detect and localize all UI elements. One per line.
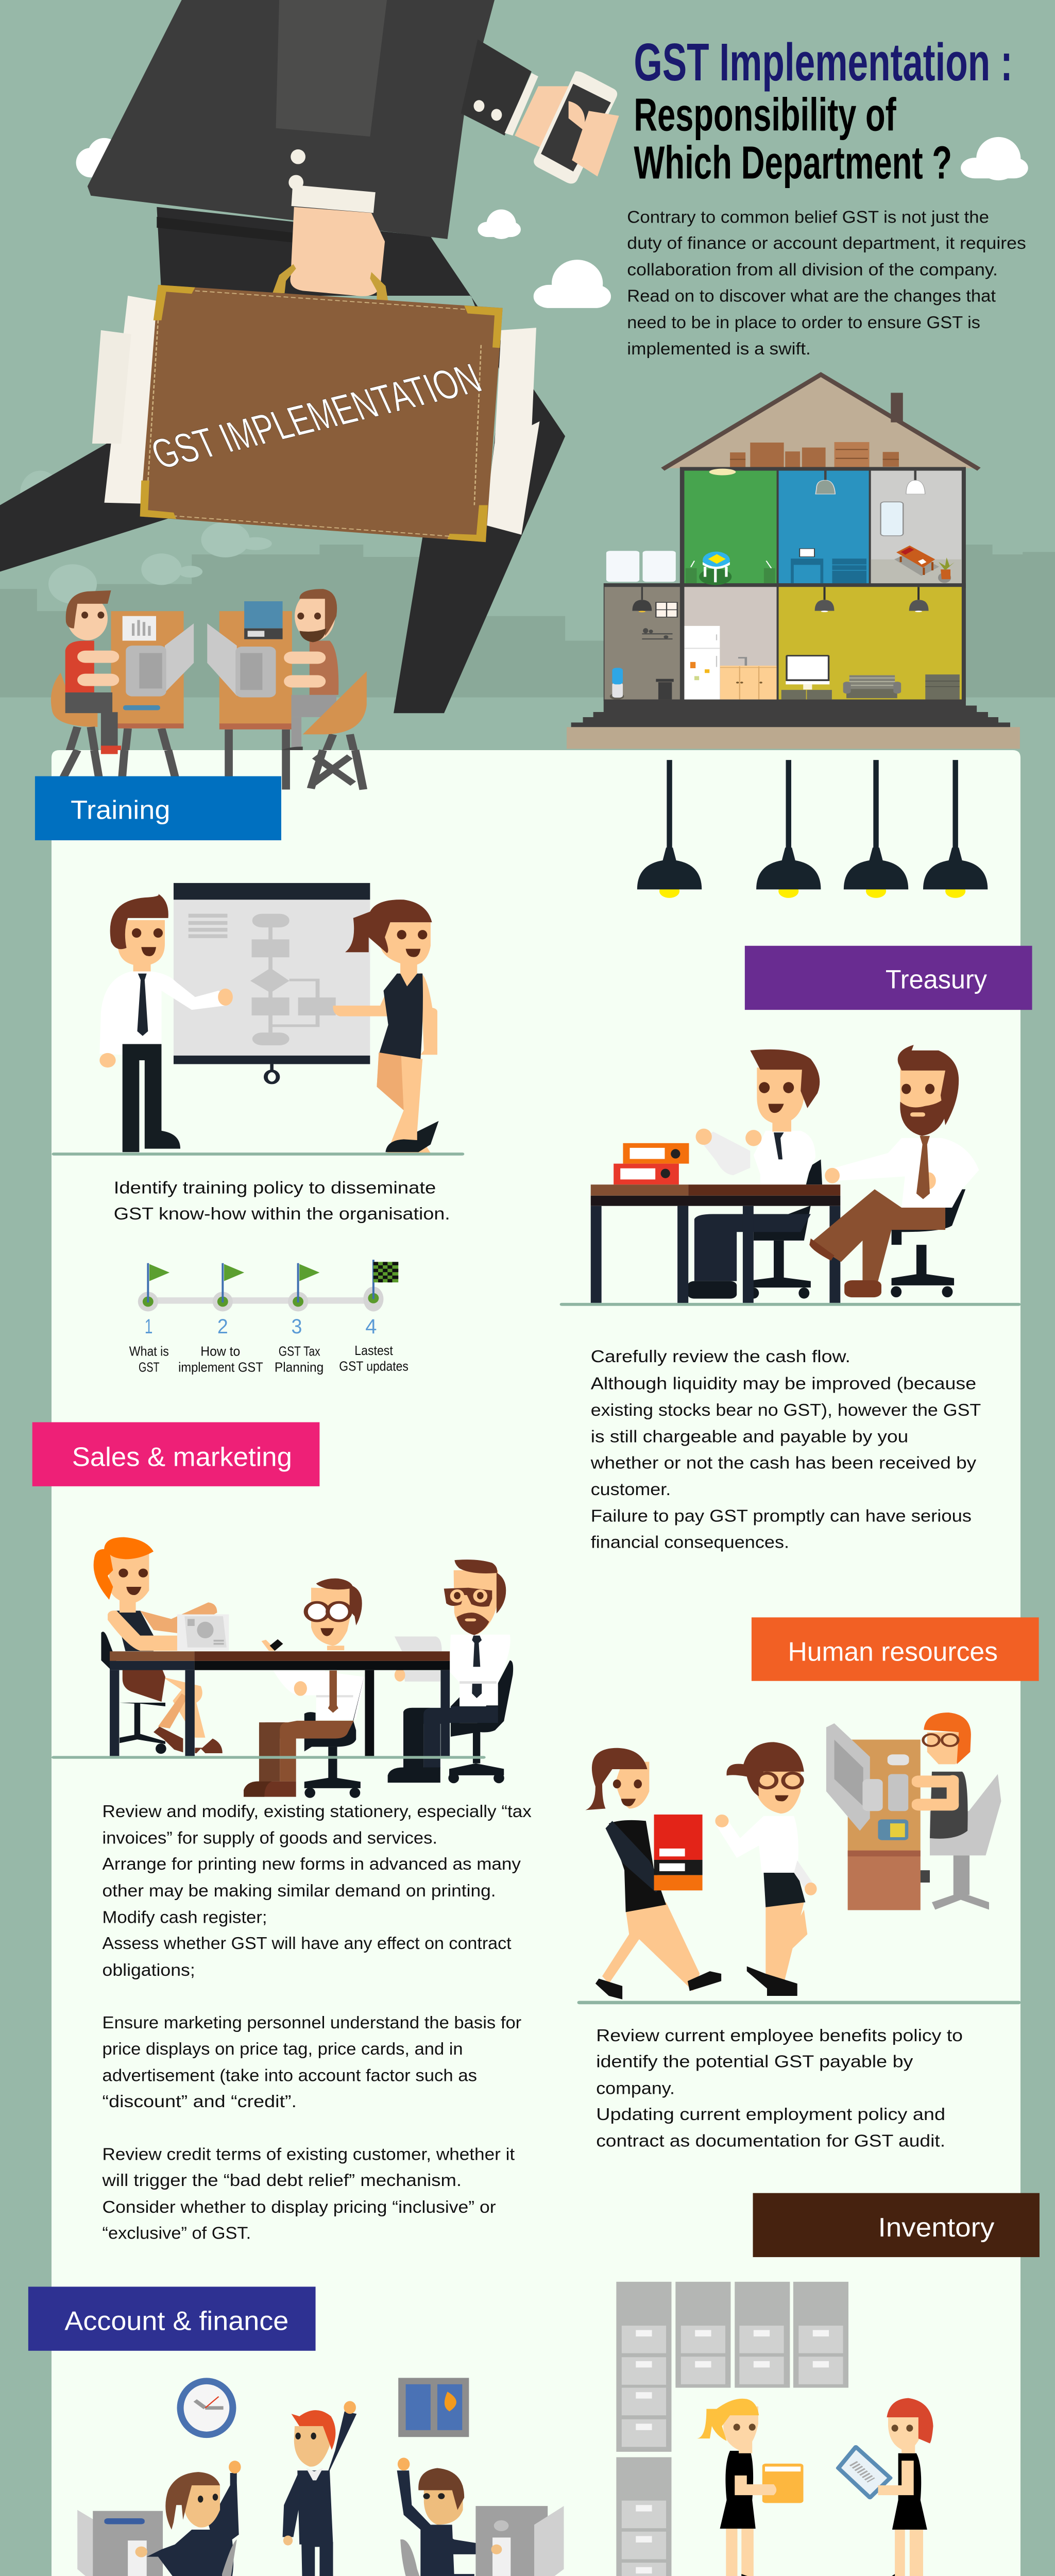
- tag: account and finance: Account & finance: [64, 2307, 288, 2336]
- intro paragraph: [627, 208, 1026, 358]
- illustration: treasury meeting: [591, 1045, 979, 1303]
- right desk and man: [397, 2458, 564, 2576]
- seated man right with beard: [809, 1045, 979, 1297]
- desk: [591, 1184, 840, 1303]
- roadmap flags: [129, 1260, 409, 1375]
- room: living: [779, 587, 962, 700]
- roadmap flags: GST: [139, 1360, 160, 1375]
- sales text end: “exclusive” of GST.: [103, 2224, 251, 2243]
- sales text end: Consider whether to display pricing “inclusive” or: [103, 2198, 496, 2216]
- treasury text part 1: Carefully review the cash flow.: [591, 1347, 850, 1366]
- seated man left: [688, 1049, 822, 1299]
- room: storage: [604, 587, 680, 700]
- title: [634, 32, 1013, 189]
- sales text: Review credit terms of existing customer, whether it: [103, 2145, 515, 2164]
- phone and hand: [515, 71, 619, 183]
- sales text end: [103, 2198, 496, 2243]
- roadmap flags: 1: [145, 1315, 152, 1338]
- roadmap flags: implement GST: [178, 1360, 263, 1375]
- main panel: [52, 750, 1020, 2576]
- HR text: contract as documentation for GST audit.: [596, 2131, 945, 2150]
- section: inventory and account: [28, 2193, 1040, 2576]
- sales text: Review and modify, existing stationery, especially “tax: [103, 1802, 532, 1821]
- sales text: price displays on price tag, price cards, and in: [103, 2040, 463, 2058]
- roadmap flags: 4: [365, 1315, 377, 1338]
- roadmap flags: 2: [217, 1315, 228, 1338]
- house roof: [663, 374, 979, 469]
- right man: [388, 1560, 513, 1783]
- roadmap flags: What is: [129, 1344, 169, 1359]
- cloud left: [76, 138, 121, 177]
- giant businessman: [0, 0, 619, 713]
- wall clock: [177, 2378, 236, 2438]
- treasury text part 2: is still chargeable and payable by you: [591, 1427, 908, 1446]
- left desk and woman: [77, 2461, 241, 2576]
- room: blue: [779, 471, 869, 583]
- HR text: [596, 2026, 963, 2150]
- sales text: will trigger the “bad debt relief” mechanism.: [102, 2171, 462, 2190]
- sales text: Modify cash register;: [103, 1908, 267, 1927]
- jacket: [88, 0, 538, 239]
- hero scene: [0, 0, 1055, 789]
- room: grey: [871, 471, 962, 583]
- tag: sales and marketing: Sales & marketing: [72, 1443, 292, 1472]
- tag: treasury: [745, 946, 1032, 1010]
- illustration: inventory: [616, 2282, 933, 2576]
- woman with folder: [696, 2399, 803, 2576]
- treasury text part 2: [590, 1427, 976, 1552]
- intro paragraph: implemented is a swift.: [627, 340, 811, 358]
- roadmap flags: 3: [292, 1315, 302, 1338]
- cuff and holding hand: [290, 185, 385, 296]
- sales text: Assess whether GST will have any effect on contract: [103, 1934, 512, 1953]
- cloud small: [478, 210, 521, 239]
- woman with binders: [585, 1748, 721, 1999]
- section: training and treasury: [35, 760, 1032, 1419]
- HR text: company.: [596, 2079, 675, 2098]
- cloud medium: [534, 260, 611, 308]
- briefcase: [92, 264, 539, 542]
- sales text: Arrange for printing new forms in advanced as many: [103, 1855, 521, 1874]
- trousers: [0, 207, 565, 713]
- meeting table: [110, 1651, 450, 1756]
- tag: human resources: [752, 1617, 1039, 1681]
- roadmap flags: Lastest: [354, 1343, 393, 1358]
- training text: [114, 1178, 450, 1224]
- training text: GST know-how within the organisation.: [114, 1205, 450, 1224]
- hanging lamps: [637, 760, 988, 898]
- roadmap flags: How to: [200, 1344, 240, 1359]
- training text: Identify training policy to disseminate: [114, 1178, 436, 1197]
- house base and steps: [567, 700, 1020, 749]
- roof-level white tanks: [606, 551, 676, 582]
- roadmap flags: Planning: [275, 1360, 324, 1375]
- section: sales and human resources: [32, 1422, 1039, 2190]
- sales text: other may be making similar demand on printing.: [103, 1882, 496, 1900]
- illustration: account and finance: [77, 2378, 564, 2576]
- cloud right: [961, 137, 1028, 180]
- roadmap flags: GST Tax: [279, 1344, 320, 1359]
- sales text: obligations;: [103, 1961, 195, 1979]
- tag: account and finance: [28, 2286, 316, 2351]
- HR text: identify the potential GST payable by: [596, 2052, 913, 2071]
- woman seated: [94, 1537, 229, 1754]
- room: kitchen: [684, 587, 777, 700]
- treasury text part 2: whether or not the cash has been received by: [590, 1453, 976, 1472]
- middle man: [244, 1579, 365, 1798]
- treasury text part 2: customer.: [591, 1480, 671, 1499]
- sales text: Ensure marketing personnel understand the basis for: [103, 2013, 521, 2032]
- roadmap flags: GST updates: [339, 1359, 409, 1374]
- left colleague at desk: [51, 590, 194, 789]
- repaint desk legs above panel: [57, 750, 363, 789]
- woman with glasses: [715, 1742, 817, 1996]
- woman with tablet: [838, 2398, 933, 2576]
- treasury text part 2: financial consequences.: [591, 1533, 789, 1552]
- tag: treasury: Treasury: [886, 965, 987, 994]
- sales text: “discount” and “credit”.: [103, 2092, 297, 2111]
- skyline: [0, 471, 1055, 698]
- tag: inventory: Inventory: [878, 2213, 994, 2243]
- standing man: [283, 2401, 356, 2576]
- tag: sales and marketing: [32, 1422, 319, 1486]
- tag: inventory: [753, 2193, 1040, 2257]
- sales text: advertisement (take into account factor such as: [103, 2066, 477, 2085]
- tag: training: [35, 776, 281, 840]
- treasury text part 2: Failure to pay GST promptly can have serious: [591, 1507, 972, 1526]
- right colleague at desk: [207, 589, 367, 789]
- sales text: [102, 1802, 532, 2190]
- tag: training: Training: [71, 795, 170, 825]
- room: green: [684, 469, 777, 585]
- illustration: sales meeting: [52, 1537, 513, 1798]
- sales text: invoices” for supply of goods and services.: [103, 1828, 437, 1848]
- HR text: Review current employee benefits policy to: [596, 2026, 963, 2045]
- briefcase label: GST IMPLEMENTATION: [144, 355, 488, 478]
- treasury text part 1: [591, 1347, 981, 1419]
- window: [398, 2378, 469, 2437]
- illustration: HR staff: [585, 1713, 1001, 1999]
- illustration: training presentation: [99, 883, 439, 1153]
- workstation: [826, 1713, 1001, 1910]
- HR text: Updating current employment policy and: [596, 2105, 945, 2124]
- house: [567, 467, 1020, 749]
